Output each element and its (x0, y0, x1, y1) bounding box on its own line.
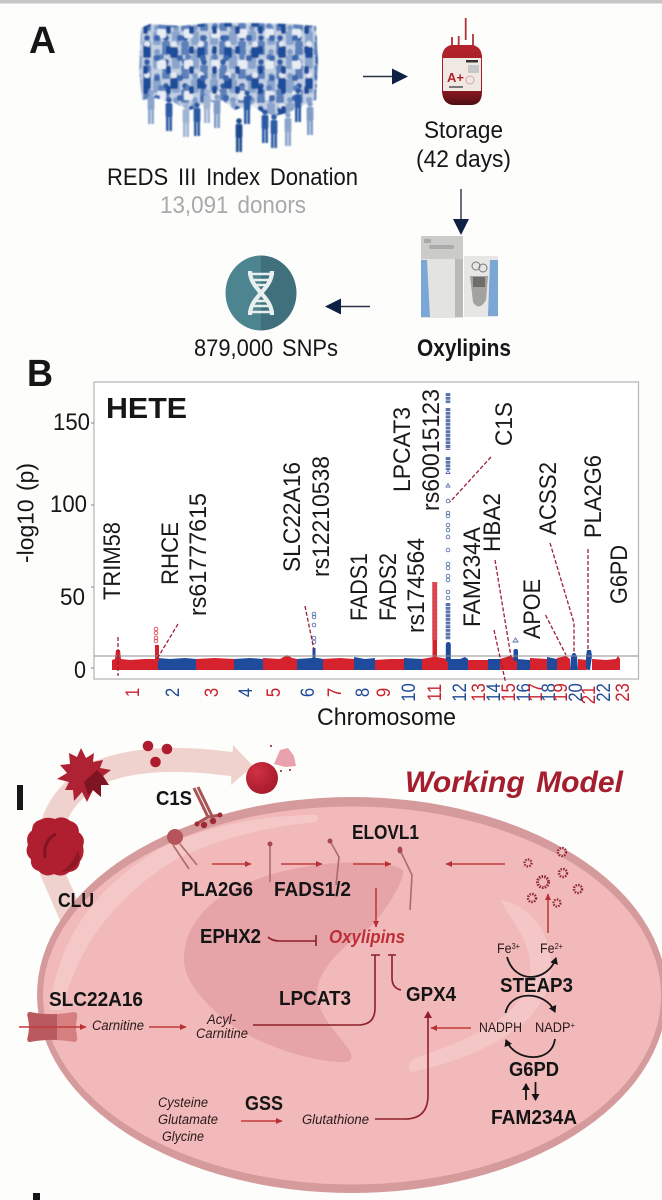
text: SNP count: 879,000 SNPs (194, 335, 338, 362)
y axis: 0 (74, 657, 86, 684)
icon: crenated red cell (28, 818, 83, 875)
gene labels: LPCAT3 (389, 407, 416, 492)
metabolite labels (92, 941, 575, 1144)
metabolite labels: Carnitine (92, 1018, 144, 1033)
plot title HETE: HETE (106, 393, 187, 425)
chromosome tick labels: 3 (201, 688, 222, 697)
chromosome tick labels (122, 683, 633, 704)
gene labels: C1S (491, 402, 518, 446)
gene labels: SLC22A16 (279, 462, 306, 572)
chromosome tick labels: 15 (498, 683, 519, 702)
chromosome tick labels: 17 (525, 683, 546, 702)
y axis: 150 (53, 409, 90, 436)
icon: DNA circle (226, 256, 296, 330)
text: Oxylipins product: Oxylipins (329, 927, 405, 947)
gene labels in cell: SLC22A16 (49, 989, 143, 1011)
Manhattan chromosome blocks (112, 582, 620, 670)
genome-wide significance line (94, 655, 638, 657)
text: storage (416, 117, 511, 173)
text: donor count: 13,091 donors (160, 192, 306, 219)
chromosome tick labels: 7 (324, 688, 345, 697)
gene labels: FADS1 (346, 553, 373, 621)
metabolite labels: Carnitine (196, 1026, 248, 1041)
arrow: storage to oxylipins (453, 189, 469, 235)
y axis: 100 (50, 491, 87, 518)
panel letter B: B (27, 353, 53, 395)
chromosome tick labels: 5 (263, 688, 284, 697)
gene labels in cell: GSS (245, 1093, 283, 1115)
chromosome tick labels: 16 (513, 683, 534, 702)
text: storage: (42 days) (416, 146, 511, 173)
panel letter A: A (29, 20, 56, 62)
metabolite labels: 3+ (512, 942, 520, 951)
gene labels: G6PD (606, 545, 633, 604)
gene labels in cell: PLA2G6 (181, 879, 253, 901)
gene labels in cell: EPHX2 (200, 926, 261, 948)
chromosome tick labels: 6 (297, 688, 318, 697)
organelle: light streak (408, 900, 551, 1072)
text: Oxylipins: Oxylipins (417, 335, 511, 362)
panel B: Manhattan plot (12, 353, 638, 731)
gene labels in cell: FAM234A (491, 1107, 577, 1129)
chromosome tick labels: 12 (449, 683, 470, 702)
gene labels: FADS2 (375, 553, 402, 621)
metabolite labels: Glycine (162, 1129, 204, 1144)
icon: donor crowd (136, 20, 320, 152)
chromosome tick labels: 4 (235, 688, 256, 697)
gene labels: PLA2G6 (580, 455, 607, 538)
gene labels: rs12210538 (308, 456, 335, 577)
y axis: -log10 (p) (12, 463, 38, 563)
plot frame (94, 382, 638, 679)
gene labels in cell: FADS1/2 (274, 879, 351, 901)
gene labels in cell: LPCAT3 (279, 988, 351, 1010)
gene labels: RHCE (157, 522, 184, 585)
chromosome tick labels: 18 (538, 683, 559, 702)
metabolite labels: Fe (497, 941, 513, 956)
red pathway arrows (149, 864, 548, 1121)
chromosome tick labels: 2 (162, 688, 183, 697)
gene labels: FAM234A (459, 527, 486, 627)
gene labels: rs174564 (403, 538, 430, 633)
dashed gene leader lines (118, 457, 588, 682)
chromosome tick labels: 21 (578, 686, 599, 704)
icon: reactive oxygen species (524, 848, 582, 906)
curved arrow: RBC ageing path (49, 745, 253, 918)
y axis: 50 (60, 584, 85, 611)
panel letter fragment (17, 785, 23, 810)
gene labels in cell: ELOVL1 (352, 822, 419, 844)
metabolite labels: Fe (540, 941, 556, 956)
gene labels: rs60015123 (418, 389, 445, 511)
chromosome tick labels: 14 (483, 683, 504, 702)
icon: spiky echinocyte (57, 748, 111, 802)
gene labels in cell (49, 822, 577, 1129)
significant SNP points (154, 393, 518, 644)
chromosome tick labels: 23 (612, 683, 633, 702)
black redox cycle arrows (506, 957, 556, 1100)
icon: phospholipid (167, 829, 197, 869)
gene labels: HBA2 (479, 493, 506, 552)
metabolite labels: Glutathione (302, 1112, 369, 1127)
organelle: endoplasmic reticulum (184, 862, 403, 1062)
gene labels in cell: STEAP3 (500, 975, 573, 997)
chromosome tick labels: 22 (593, 683, 614, 702)
icon: microvesicles (143, 741, 172, 767)
metabolite labels: Glutamate (158, 1112, 218, 1127)
metabolite labels: + (571, 1021, 575, 1030)
panel A: study workflow (29, 18, 511, 362)
metabolite labels: Acyl- (206, 1012, 236, 1027)
icon: mass spectrometer (421, 236, 498, 318)
metabolite labels: NADPH (479, 1020, 522, 1035)
metabolite labels: NADP (535, 1020, 573, 1035)
icon: lysing red cell (246, 745, 296, 794)
text: REDS III Index Donation: REDS III Index Donation (107, 164, 358, 191)
chromosome tick labels: 9 (373, 688, 394, 697)
gene labels: TRIM58 (99, 522, 126, 600)
chromosome tick labels: 10 (398, 683, 419, 702)
gene labels in cell: G6PD (509, 1059, 559, 1081)
text: Working Model: Working Model (405, 766, 624, 799)
icon: C1S receptor with label (156, 787, 222, 828)
metabolite labels: Cysteine (158, 1095, 208, 1110)
gene labels: APOE (519, 579, 546, 639)
icon: C1S receptor with label: C1S (156, 788, 192, 810)
icon: carnitine transporter (19, 1012, 86, 1042)
gene labels: ACSS2 (535, 462, 562, 535)
panel C: working model (17, 741, 662, 1200)
icon: blood bag: A+ (447, 70, 464, 85)
gene labels (99, 389, 633, 639)
arrow: oxylipins to SNPs (325, 298, 370, 314)
chromosome tick labels: 13 (468, 683, 489, 702)
text: storage: Storage (424, 117, 503, 144)
x axis title: Chromosome (317, 704, 456, 731)
chromosome tick labels: 11 (424, 684, 445, 701)
inhibition and enzyme lines (253, 935, 428, 1119)
chromosome tick labels: 8 (352, 688, 373, 697)
icon: blood bag (442, 18, 482, 105)
metabolite labels: 2+ (555, 942, 563, 951)
lipid sticks (268, 838, 412, 910)
gene labels in cell: GPX4 (406, 984, 457, 1006)
arrow: crowd to storage (363, 68, 408, 84)
cell body (37, 797, 662, 1193)
gene labels: rs61777615 (185, 493, 212, 616)
text: CLU: CLU (58, 890, 94, 912)
chromosome tick labels: 1 (122, 688, 143, 697)
y axis (12, 409, 94, 684)
top edge bar (0, 0, 662, 4)
chromosome tick labels: 19 (550, 683, 571, 702)
chromosome tick labels: 20 (565, 683, 586, 702)
bottom panel letter fragment (33, 1193, 40, 1200)
